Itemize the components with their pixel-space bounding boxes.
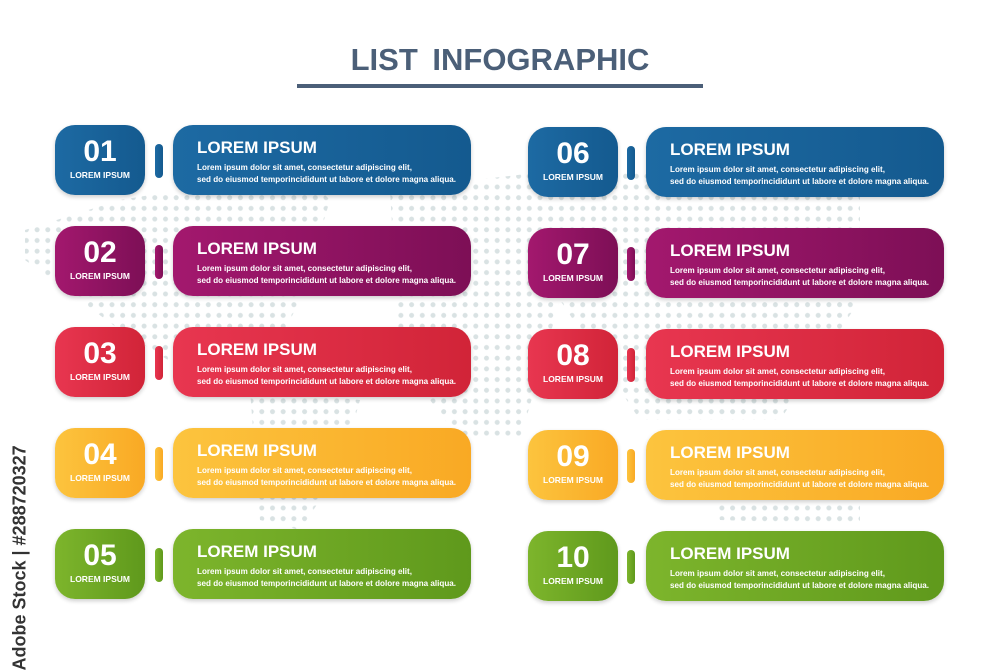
item 07: LOREM IPSUM [543,273,603,283]
item 06: LOREM IPSUM [670,140,790,159]
item 06: sed do eiusmod temporincididunt ut labore et dolore magna aliqua. [670,177,929,186]
title: LIST INFOGRAPHIC [351,42,649,77]
item 04 [53,428,473,502]
item 09: sed do eiusmod temporincididunt ut labore et dolore magna aliqua. [670,480,929,489]
item 06: Lorem ipsum dolor sit amet, consectetur adipiscing elit, [670,165,885,174]
item 07: Lorem ipsum dolor sit amet, consectetur adipiscing elit, [670,266,885,275]
item 04: sed do eiusmod temporincididunt ut labore et dolore magna aliqua. [197,478,456,487]
item 10: 10 [556,541,590,574]
item 03: LOREM IPSUM [197,340,317,359]
item 10: Lorem ipsum dolor sit amet, consectetur adipiscing elit, [670,569,885,578]
watermark vertical text: Adobe Stock | #288720327 [10,445,30,670]
item 05: LOREM IPSUM [70,574,130,584]
item 06: 06 [556,137,590,170]
item 06: LOREM IPSUM [543,172,603,182]
item 01: 01 [83,135,117,168]
item 08: LOREM IPSUM [543,374,603,384]
item 02: LOREM IPSUM [70,271,130,281]
item 05: 05 [83,539,117,572]
item 07: LOREM IPSUM [670,241,790,260]
item 09: 09 [556,440,590,473]
item 01: LOREM IPSUM [197,138,317,157]
item 02 [53,226,473,300]
item 05: sed do eiusmod temporincididunt ut labore et dolore magna aliqua. [197,579,456,588]
item 09: LOREM IPSUM [543,475,603,485]
item 09 [526,430,946,504]
item 09: LOREM IPSUM [670,443,790,462]
item 08 [526,329,946,403]
item 01: Lorem ipsum dolor sit amet, consectetur adipiscing elit, [197,163,412,172]
item 02: sed do eiusmod temporincididunt ut labore et dolore magna aliqua. [197,276,456,285]
item 04: LOREM IPSUM [70,473,130,483]
item 04: Lorem ipsum dolor sit amet, consectetur adipiscing elit, [197,466,412,475]
item 09: Lorem ipsum dolor sit amet, consectetur adipiscing elit, [670,468,885,477]
item 03: 03 [83,337,117,370]
item 03: LOREM IPSUM [70,372,130,382]
item 06 [526,127,946,201]
item 02: LOREM IPSUM [197,239,317,258]
item 01: sed do eiusmod temporincididunt ut labore et dolore magna aliqua. [197,175,456,184]
item 03: sed do eiusmod temporincididunt ut labore et dolore magna aliqua. [197,377,456,386]
item 10: LOREM IPSUM [543,576,603,586]
item 05: LOREM IPSUM [197,542,317,561]
item 02: 02 [83,236,117,269]
item 07: sed do eiusmod temporincididunt ut labore et dolore magna aliqua. [670,278,929,287]
item 10: LOREM IPSUM [670,544,790,563]
item 08: 08 [556,339,590,372]
item 03: Lorem ipsum dolor sit amet, consectetur adipiscing elit, [197,365,412,374]
item 05: Lorem ipsum dolor sit amet, consectetur adipiscing elit, [197,567,412,576]
item 08: sed do eiusmod temporincididunt ut labore et dolore magna aliqua. [670,379,929,388]
item 10 [526,531,946,605]
title underline [297,84,703,88]
item 10: sed do eiusmod temporincididunt ut labore et dolore magna aliqua. [670,581,929,590]
item 02: Lorem ipsum dolor sit amet, consectetur adipiscing elit, [197,264,412,273]
item 03 [53,327,473,401]
item 04: 04 [83,438,117,471]
item 01: LOREM IPSUM [70,170,130,180]
item 05 [53,529,473,603]
item 08: Lorem ipsum dolor sit amet, consectetur adipiscing elit, [670,367,885,376]
item 07 [526,228,946,302]
item 04: LOREM IPSUM [197,441,317,460]
item 01 [53,125,473,199]
item 07: 07 [556,238,590,271]
item 08: LOREM IPSUM [670,342,790,361]
